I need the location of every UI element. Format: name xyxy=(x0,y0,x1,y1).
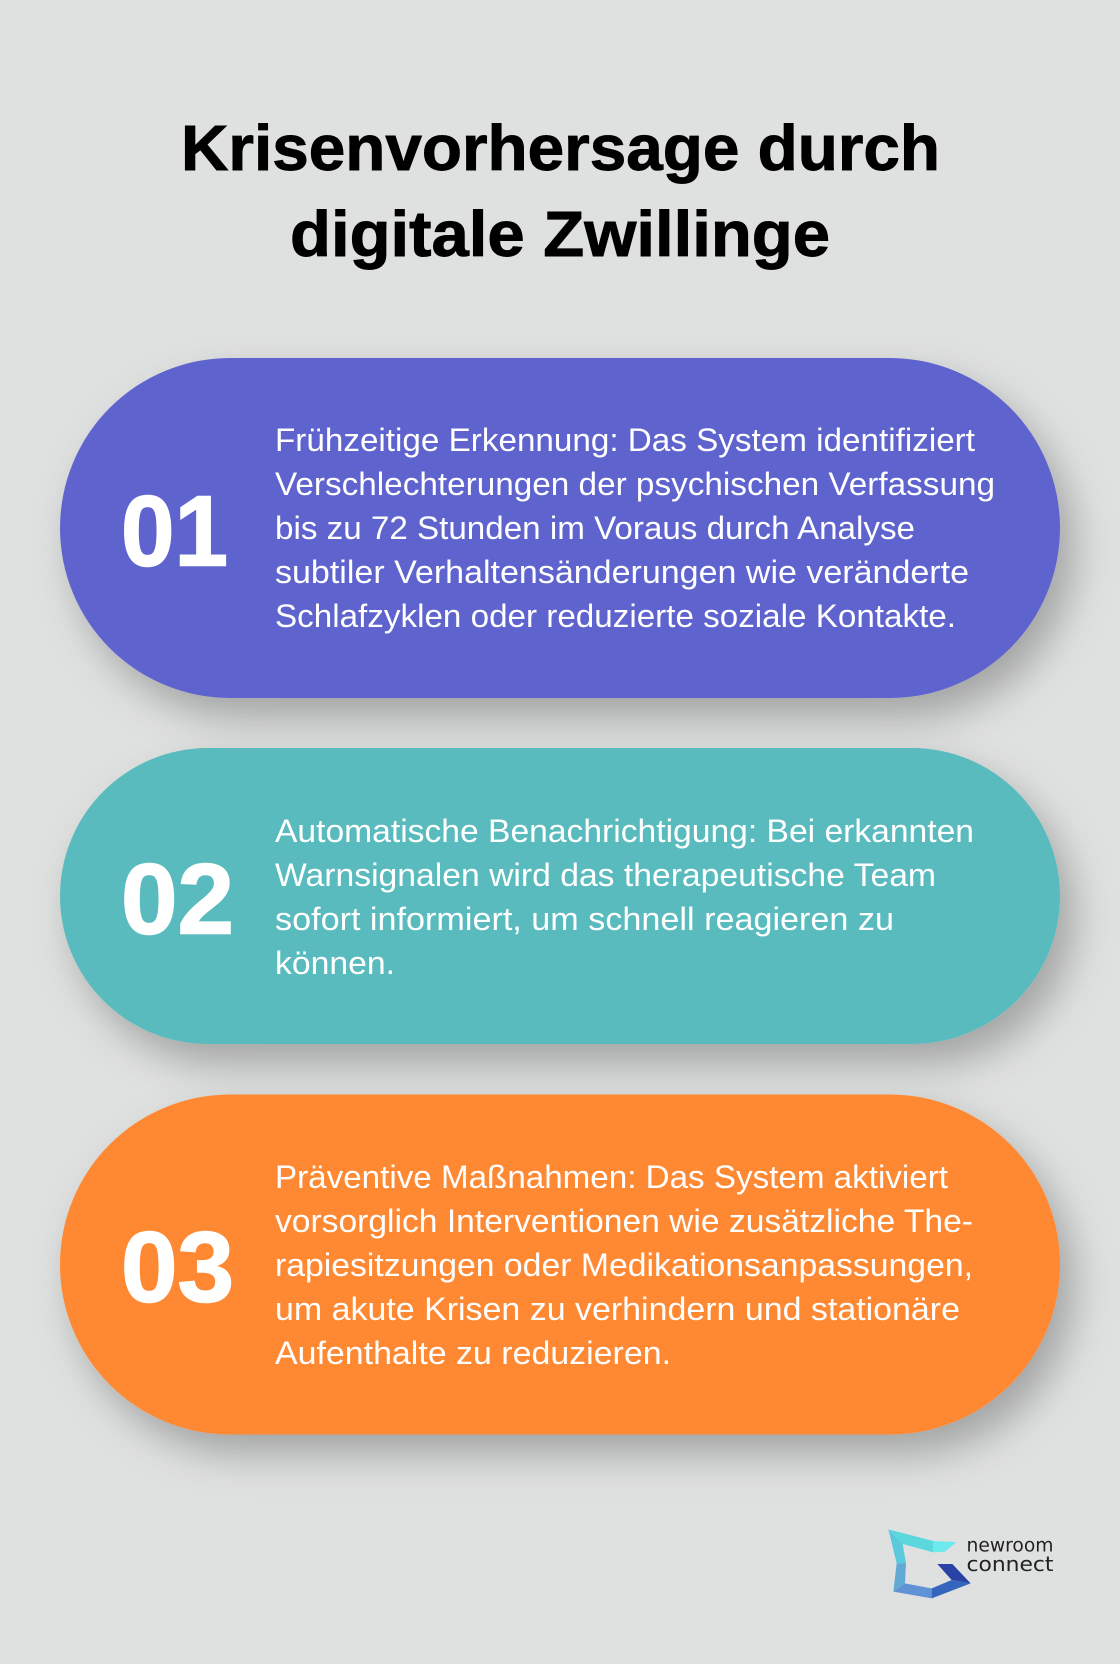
title xyxy=(181,112,940,270)
text block 01: Frühzeitige Erkennung: Das System identifiziert xyxy=(275,422,975,458)
text block 01: Verschlechterungen der psychischen Verfassung xyxy=(275,466,995,502)
number 03: 03 xyxy=(121,1212,234,1324)
text block 02: Automatische Benachrichtigung: Bei erkannten xyxy=(275,813,974,849)
text block 03: rapiesitzungen oder Medikationsanpassungen, xyxy=(275,1247,973,1283)
text block 03: Präventive Maßnahmen: Das System aktiviert xyxy=(275,1159,948,1195)
pill background 03 xyxy=(60,1094,1060,1434)
text block 03: Aufenthalte zu reduzieren. xyxy=(275,1335,671,1371)
number 01: 01 xyxy=(121,476,228,588)
text block 02: Warnsignalen wird das therapeutische Team xyxy=(275,857,936,893)
pill background 02 xyxy=(60,748,1060,1044)
text block 03: vorsorglich Interventionen wie zusätzliche The- xyxy=(275,1203,973,1239)
number 02: 02 xyxy=(121,844,234,956)
text block 03 xyxy=(275,1159,973,1371)
pill background 01 xyxy=(60,358,1060,698)
title: digitale Zwillinge xyxy=(290,198,830,270)
icon: logo mark xyxy=(888,1529,971,1598)
panel: step 03 xyxy=(60,1094,1060,1434)
text block 02: können. xyxy=(275,945,395,981)
text block 01: bis zu 72 Stunden im Voraus durch Analyse xyxy=(275,510,915,546)
panel: step 02 xyxy=(60,748,1060,1044)
logo wordmark xyxy=(966,1534,1054,1576)
logo: newroom connect xyxy=(888,1529,1054,1598)
text block 01 xyxy=(275,422,995,634)
text block 03: um akute Krisen zu verhindern und stationäre xyxy=(275,1291,960,1327)
text block 02: sofort informiert, um schnell reagieren zu xyxy=(275,901,894,937)
logo wordmark: newroom xyxy=(966,1534,1054,1556)
logo wordmark: connect xyxy=(966,1552,1054,1576)
text block 01: Schlafzyklen oder reduzierte soziale Kontakte. xyxy=(275,598,956,634)
title: Krisenvorhersage durch xyxy=(181,112,940,184)
text block 01: subtiler Verhaltensänderungen wie veränderte xyxy=(275,554,969,590)
panel: step 01 xyxy=(60,358,1060,698)
text block 02 xyxy=(275,813,974,981)
